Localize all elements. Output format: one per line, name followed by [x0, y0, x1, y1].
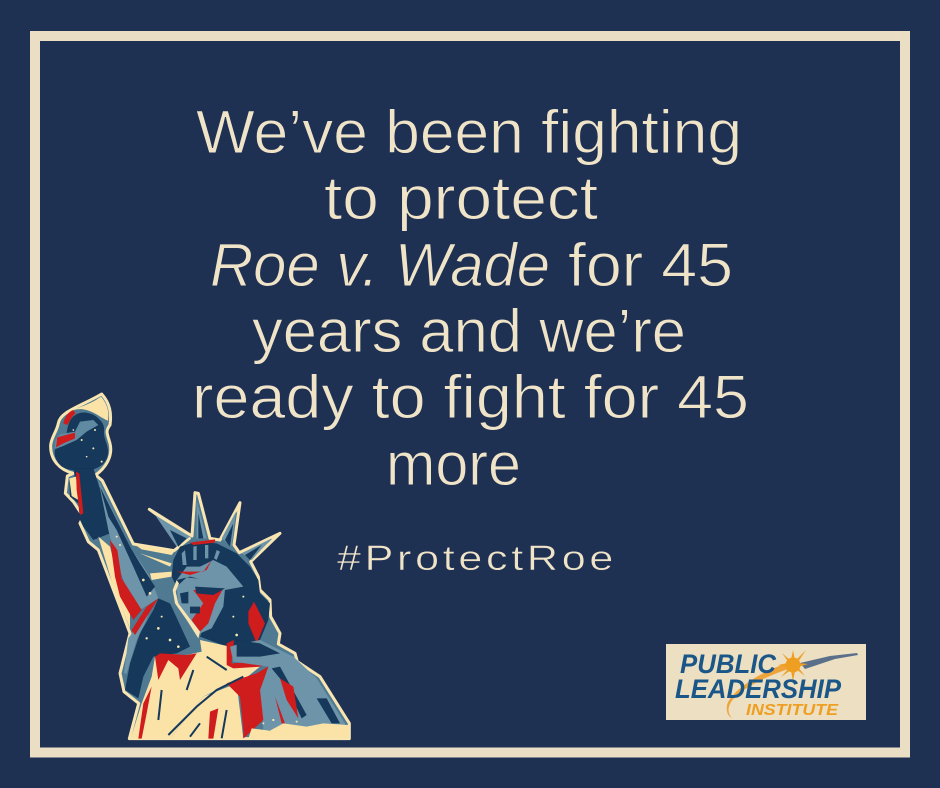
quote text: years and we’re: [252, 297, 686, 365]
statue outline: [51, 394, 349, 739]
logo swoosh: [727, 662, 792, 718]
right drape: [230, 640, 345, 730]
neck and gown: [131, 640, 260, 739]
quote text: [192, 98, 749, 498]
speckles: [72, 429, 298, 724]
logo: Public Leadership Institute: INSTITUTE: [746, 702, 839, 719]
quote text: more: [386, 430, 521, 498]
logo streak: [800, 653, 858, 669]
logo sun: [778, 650, 808, 681]
crown rays: [155, 500, 272, 560]
logo: Public Leadership Institute: LEADERSHIP: [675, 674, 842, 704]
hair: [248, 602, 265, 643]
quote text: Roe v. Wade: [210, 231, 550, 299]
face: [177, 577, 225, 633]
logo wordmark: PUBLIC: [680, 649, 776, 679]
flame: [65, 397, 108, 421]
logo: Public Leadership Institute: [666, 644, 866, 720]
torch: [55, 413, 108, 471]
raised arm: [98, 480, 158, 610]
quote text: We’ve been fighting: [196, 98, 742, 166]
quote text: for 45: [568, 231, 733, 299]
quote text: to protect: [324, 164, 598, 232]
logo panel: [666, 644, 866, 720]
shoulder dark drape: [125, 598, 190, 698]
torch handle and hand: [69, 468, 110, 540]
hashtag: #ProtectRoe: [337, 539, 617, 578]
crown: [172, 542, 270, 647]
illustration: Statue of Liberty: [51, 394, 349, 739]
fabric folds: [158, 657, 243, 738]
gown red folds: [138, 640, 273, 739]
quote text: ready to fight for 45: [192, 363, 749, 431]
